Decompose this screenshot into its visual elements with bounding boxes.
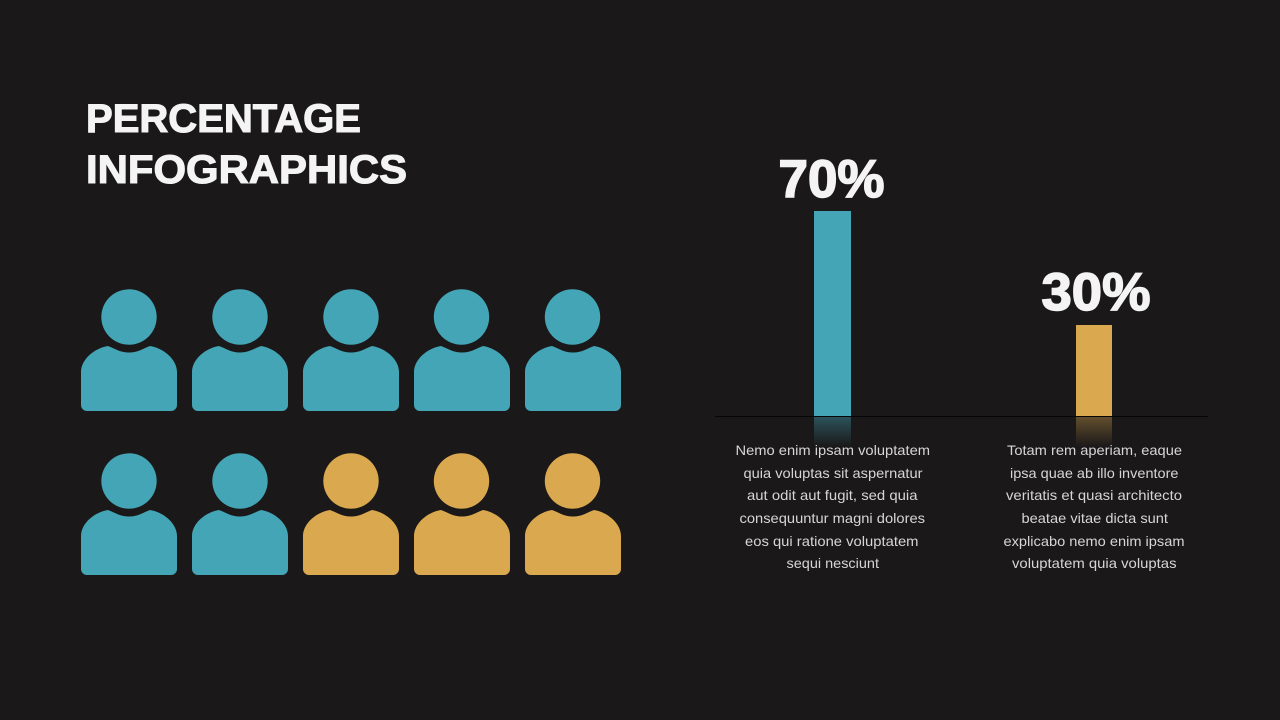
person 10 yellow <box>525 453 621 575</box>
title: INFOGRAPHICS <box>86 148 407 192</box>
text block: right description: beatae vitae dicta sunt <box>1022 510 1168 526</box>
bar chart <box>715 150 1208 447</box>
text block: left description <box>736 442 930 571</box>
person 6 teal <box>81 453 177 575</box>
person 7 teal <box>192 453 288 575</box>
bar reflection 70% <box>814 417 851 447</box>
person 3 teal <box>303 289 399 411</box>
person 9 yellow <box>414 453 510 575</box>
title: PERCENTAGE <box>86 97 361 141</box>
person 1 teal <box>81 289 177 411</box>
bar reflection 30% <box>1076 417 1112 447</box>
text block: right description: voluptatem quia voluptas <box>1012 555 1176 571</box>
person 5 teal <box>525 289 621 411</box>
text block: right description: ipsa quae ab illo inventore <box>1010 465 1179 481</box>
text block: left description: consequuntur magni dolores <box>740 510 925 526</box>
text block: left description: Nemo enim ipsam voluptatem <box>736 442 930 458</box>
bar 70% <box>814 211 851 416</box>
text block: right description <box>1004 442 1184 571</box>
title <box>86 97 407 192</box>
baseline <box>715 416 1208 417</box>
text block: left description: eos qui ratione voluptatem <box>745 533 918 549</box>
text block: left description: quia voluptas sit aspernatur <box>744 465 923 481</box>
text block: right description: veritatis et quasi architecto <box>1006 487 1182 503</box>
value label 70%: 70% <box>778 150 884 209</box>
person 8 yellow <box>303 453 399 575</box>
bar 30% <box>1076 325 1112 416</box>
text block: left description: aut odit aut fugit, sed quia <box>747 487 918 503</box>
pictogram: 10 people, 7 teal and 3 yellow <box>81 289 621 575</box>
text block: left description: sequi nesciunt <box>786 555 879 571</box>
text block: right description: Totam rem aperiam, eaque <box>1007 442 1182 458</box>
person 4 teal <box>414 289 510 411</box>
value label 30%: 30% <box>1042 263 1150 322</box>
person 2 teal <box>192 289 288 411</box>
text block: right description: explicabo nemo enim ipsam <box>1004 533 1184 549</box>
